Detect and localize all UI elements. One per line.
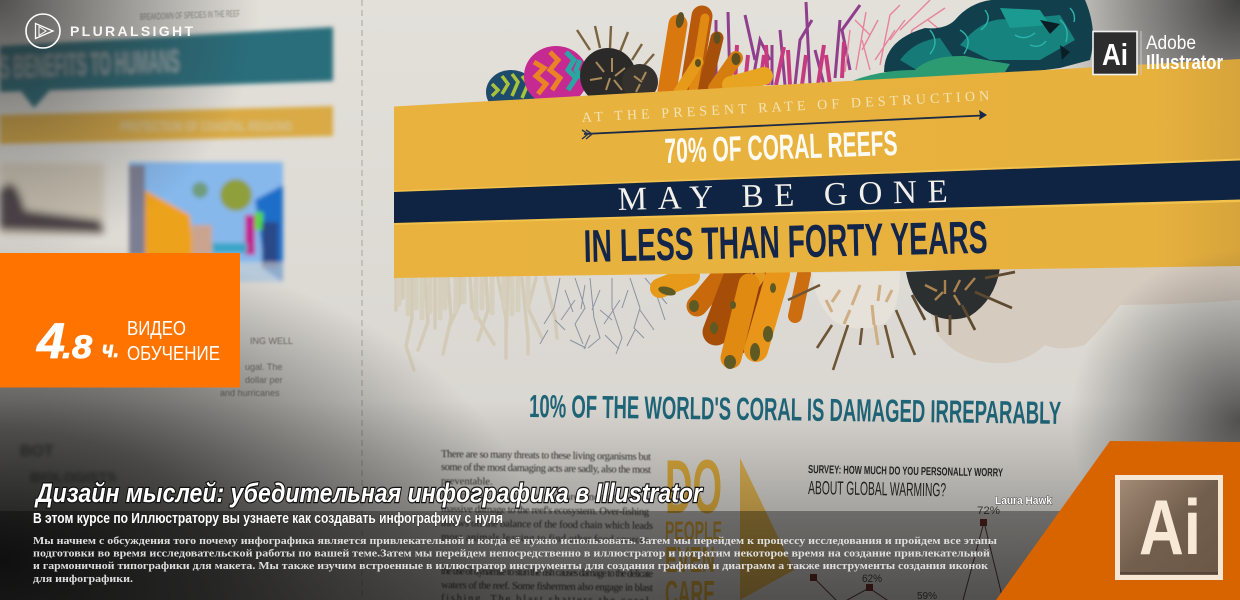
blurred photo: colourful street: [129, 162, 283, 284]
coral: orange tubes: [667, 16, 764, 92]
course title: Дизайн мыслей: убедительная инфографика в Illustrator: [34, 478, 703, 508]
coral: patterned blue ball: [486, 70, 536, 114]
coral illustrations above the banner: [486, 0, 1093, 114]
navy slanted stripe: [394, 158, 1240, 225]
yellow banner with heading: [0, 106, 333, 144]
yellow banner with heading: PROTECTION OF COASTAL REGIONS: [120, 118, 292, 134]
orange tubes: [660, 274, 804, 358]
survey line chart: 72%: [977, 505, 1000, 517]
survey heading: [808, 464, 1003, 501]
badge: illustrator corner: [996, 441, 1240, 600]
banner line: at the present rate of destruction: AT THE PRESENT RATE OF DESTRUCTION: [581, 89, 990, 126]
body text column: Destructive fishing practices are among the most: [441, 490, 649, 504]
orange corner shape: [996, 441, 1240, 600]
body text column: preventable.: [441, 476, 493, 488]
orange panel: [0, 253, 240, 388]
banner line: in less than forty years: IN LESS THAN FORTY YEARS: [583, 211, 988, 272]
blurred lower left text: BOT: [20, 443, 54, 460]
survey heading: ABOUT GLOBAL WARMING?: [808, 478, 946, 501]
badge label: ОБУЧЕНИЕ: [127, 343, 220, 365]
orange tube ends: [657, 283, 776, 369]
badge label: ВИДЕО: [127, 318, 186, 340]
coral tube ends: [675, 11, 740, 67]
brand name: PLURALSIGHT: [70, 23, 193, 39]
wordmark: Illustrator: [1146, 52, 1223, 74]
coral illustrations below the banner: [396, 255, 1240, 370]
body text column: There are so many threats to these living organisms but: [441, 449, 651, 463]
badge label: [127, 318, 220, 365]
blurred lower left text: BIOLOGISTS: [30, 469, 116, 485]
duration value: ч.: [102, 337, 119, 362]
icon: ai tile: [1118, 478, 1220, 578]
yellow slanted banner: [394, 59, 1240, 278]
course subtitle: В этом курсе по Иллюстратору вы узнаете как создавать инфографику с нуля: [33, 510, 503, 527]
body text column: waters of the reef. Some fishermen also engage in blast: [441, 580, 653, 594]
teal banner with heading: [0, 27, 333, 108]
logo: adobe illustrator: [1093, 31, 1223, 75]
dark caption strip: [0, 511, 1240, 600]
author name: Laura Hawk: [995, 495, 1053, 507]
do people even care arrow graphic: DO: [665, 445, 722, 530]
teal banner with heading: S BENEFITS TO HUMANS: [0, 43, 180, 85]
icon: ai tile: Ai: [1139, 483, 1201, 571]
beige sponge blob: [928, 255, 1240, 363]
logo: pluralsight: [26, 14, 193, 48]
blurred text under photos: [220, 336, 293, 398]
lower vignettes: [0, 220, 1240, 600]
body text column: some of the most damaging acts are sadly, also the most: [441, 462, 651, 476]
survey line chart: [810, 505, 1004, 600]
course description: Мы начнем с обсуждения того почему инфографика является привлекательной и когда её нужно использовать. Затем мы перейдем к процессу исследования и пройдем все этапы: [33, 535, 997, 547]
banner line: 70% of coral reefs: 70% OF CORAL REEFS: [664, 124, 898, 171]
coral: teal brain coral: [852, 0, 1093, 81]
duration value: .8: [62, 329, 92, 365]
blurred photo: seashore: [0, 163, 104, 235]
cream coral roots: [396, 278, 557, 370]
course description: [33, 535, 997, 585]
duration value: 4: [36, 313, 65, 369]
wordmark: [1146, 33, 1223, 74]
corner vignettes behind the banner: [0, 0, 1240, 300]
body text column: massive damage to the reef's ecosystem. Over-fishing: [441, 504, 650, 518]
coral: patterned magenta ball: [524, 46, 588, 106]
course description: и гармоничной типографики для макета. Мы также изучим встроенные в иллюстратор инструменты для создания графиков и диаграмм а также инструменты создания иконок: [33, 560, 989, 572]
blurred text under photos: ING WELL: [250, 336, 293, 346]
course description: для инфографики.: [33, 573, 133, 585]
dark sea urchin: [906, 268, 1015, 335]
duration value: [36, 313, 119, 369]
body text column: throws off the balance of the food chain which leads: [441, 518, 653, 532]
do people even care arrow graphic: PEOPLE: [665, 516, 722, 546]
banner line: may be gone: MAY BE GONE: [617, 174, 948, 218]
dashed fold line: [361, 0, 363, 600]
coral: dark sea urchin: [577, 26, 658, 104]
body text column: [441, 449, 653, 600]
course description: подготовки во время исследовательской работы по вашей теме.Затем мы перейдем непосредственно в иллюстратор и потратим некоторое время на создание привлекательной: [33, 548, 991, 560]
body text column: more animals leaving to find other food sources: [441, 532, 649, 546]
blurred text under photos: ugal. The: [245, 362, 282, 372]
wordmark: Adobe: [1146, 33, 1196, 54]
icon: play logo: [26, 14, 60, 48]
arrow under banner line: [582, 110, 987, 139]
coral: purple and pink strands: [716, 0, 945, 85]
blurred text under photos: and hurricanes: [220, 388, 280, 398]
blurred left page of poster: [0, 9, 333, 485]
blue grey branching coral: [540, 278, 667, 354]
divider: [1140, 31, 1142, 75]
survey line chart: 62%: [862, 573, 882, 585]
body text column: the use of dynamite to stun the fish causes damage to the delicate: [441, 566, 653, 580]
do people even care arrow graphic: EVEN: [665, 539, 715, 580]
white sea urchin: [788, 271, 915, 370]
small heading above banner: BREAKDOWN OF SPECIES IN THE REEF: [140, 9, 240, 22]
icon: ai square: Ai: [1102, 37, 1128, 72]
do people even care arrow graphic: [665, 445, 794, 600]
blurred lower left text: [20, 443, 116, 485]
blurred text under photos: dollar per: [245, 375, 283, 385]
badge: course duration: [0, 253, 240, 388]
survey heading: SURVEY: HOW MUCH DO YOU PERSONALLY WORRY: [808, 464, 1003, 479]
